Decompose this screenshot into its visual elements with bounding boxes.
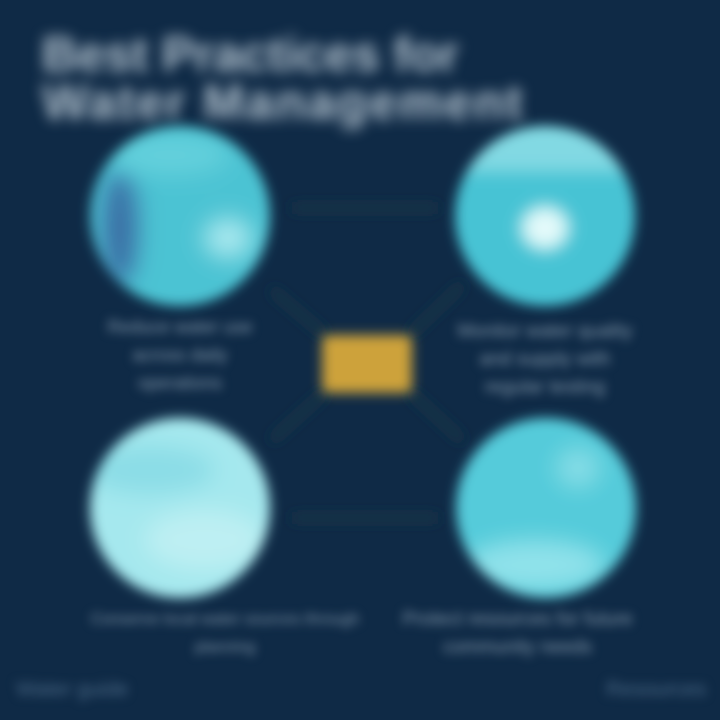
diagram: circles, connectors and hub xyxy=(80,116,645,608)
caption: bottom right: community needs xyxy=(443,637,592,658)
caption: top right: Monitor water quality xyxy=(457,321,633,342)
circle: top left xyxy=(90,126,270,306)
title xyxy=(34,26,529,138)
title: Best Practices for xyxy=(42,28,459,82)
caption: top right xyxy=(454,320,635,400)
caption: bottom right: Protect resources for future xyxy=(402,609,633,630)
caption: bottom left: planning xyxy=(195,639,255,656)
caption: top left: Reduce water use xyxy=(107,317,253,337)
caption: bottom right xyxy=(399,608,635,658)
circle: top right xyxy=(450,120,640,306)
connectors xyxy=(272,208,462,518)
caption: top left: operations xyxy=(138,373,222,393)
footer: right: Resources xyxy=(606,678,706,701)
caption: top right: regular testing xyxy=(485,377,605,398)
circle: bottom right xyxy=(456,418,636,598)
center hub xyxy=(322,335,412,393)
caption: top left xyxy=(104,316,254,395)
circle: bottom left xyxy=(85,418,270,598)
caption: top left: across daily xyxy=(132,345,228,365)
footer: left: Water guide xyxy=(16,678,128,701)
title: Water Management xyxy=(42,76,525,130)
caption: top right: and supply with xyxy=(480,349,610,370)
caption: bottom left: Conserve local water sources through xyxy=(91,611,359,628)
caption: bottom left xyxy=(89,610,361,658)
